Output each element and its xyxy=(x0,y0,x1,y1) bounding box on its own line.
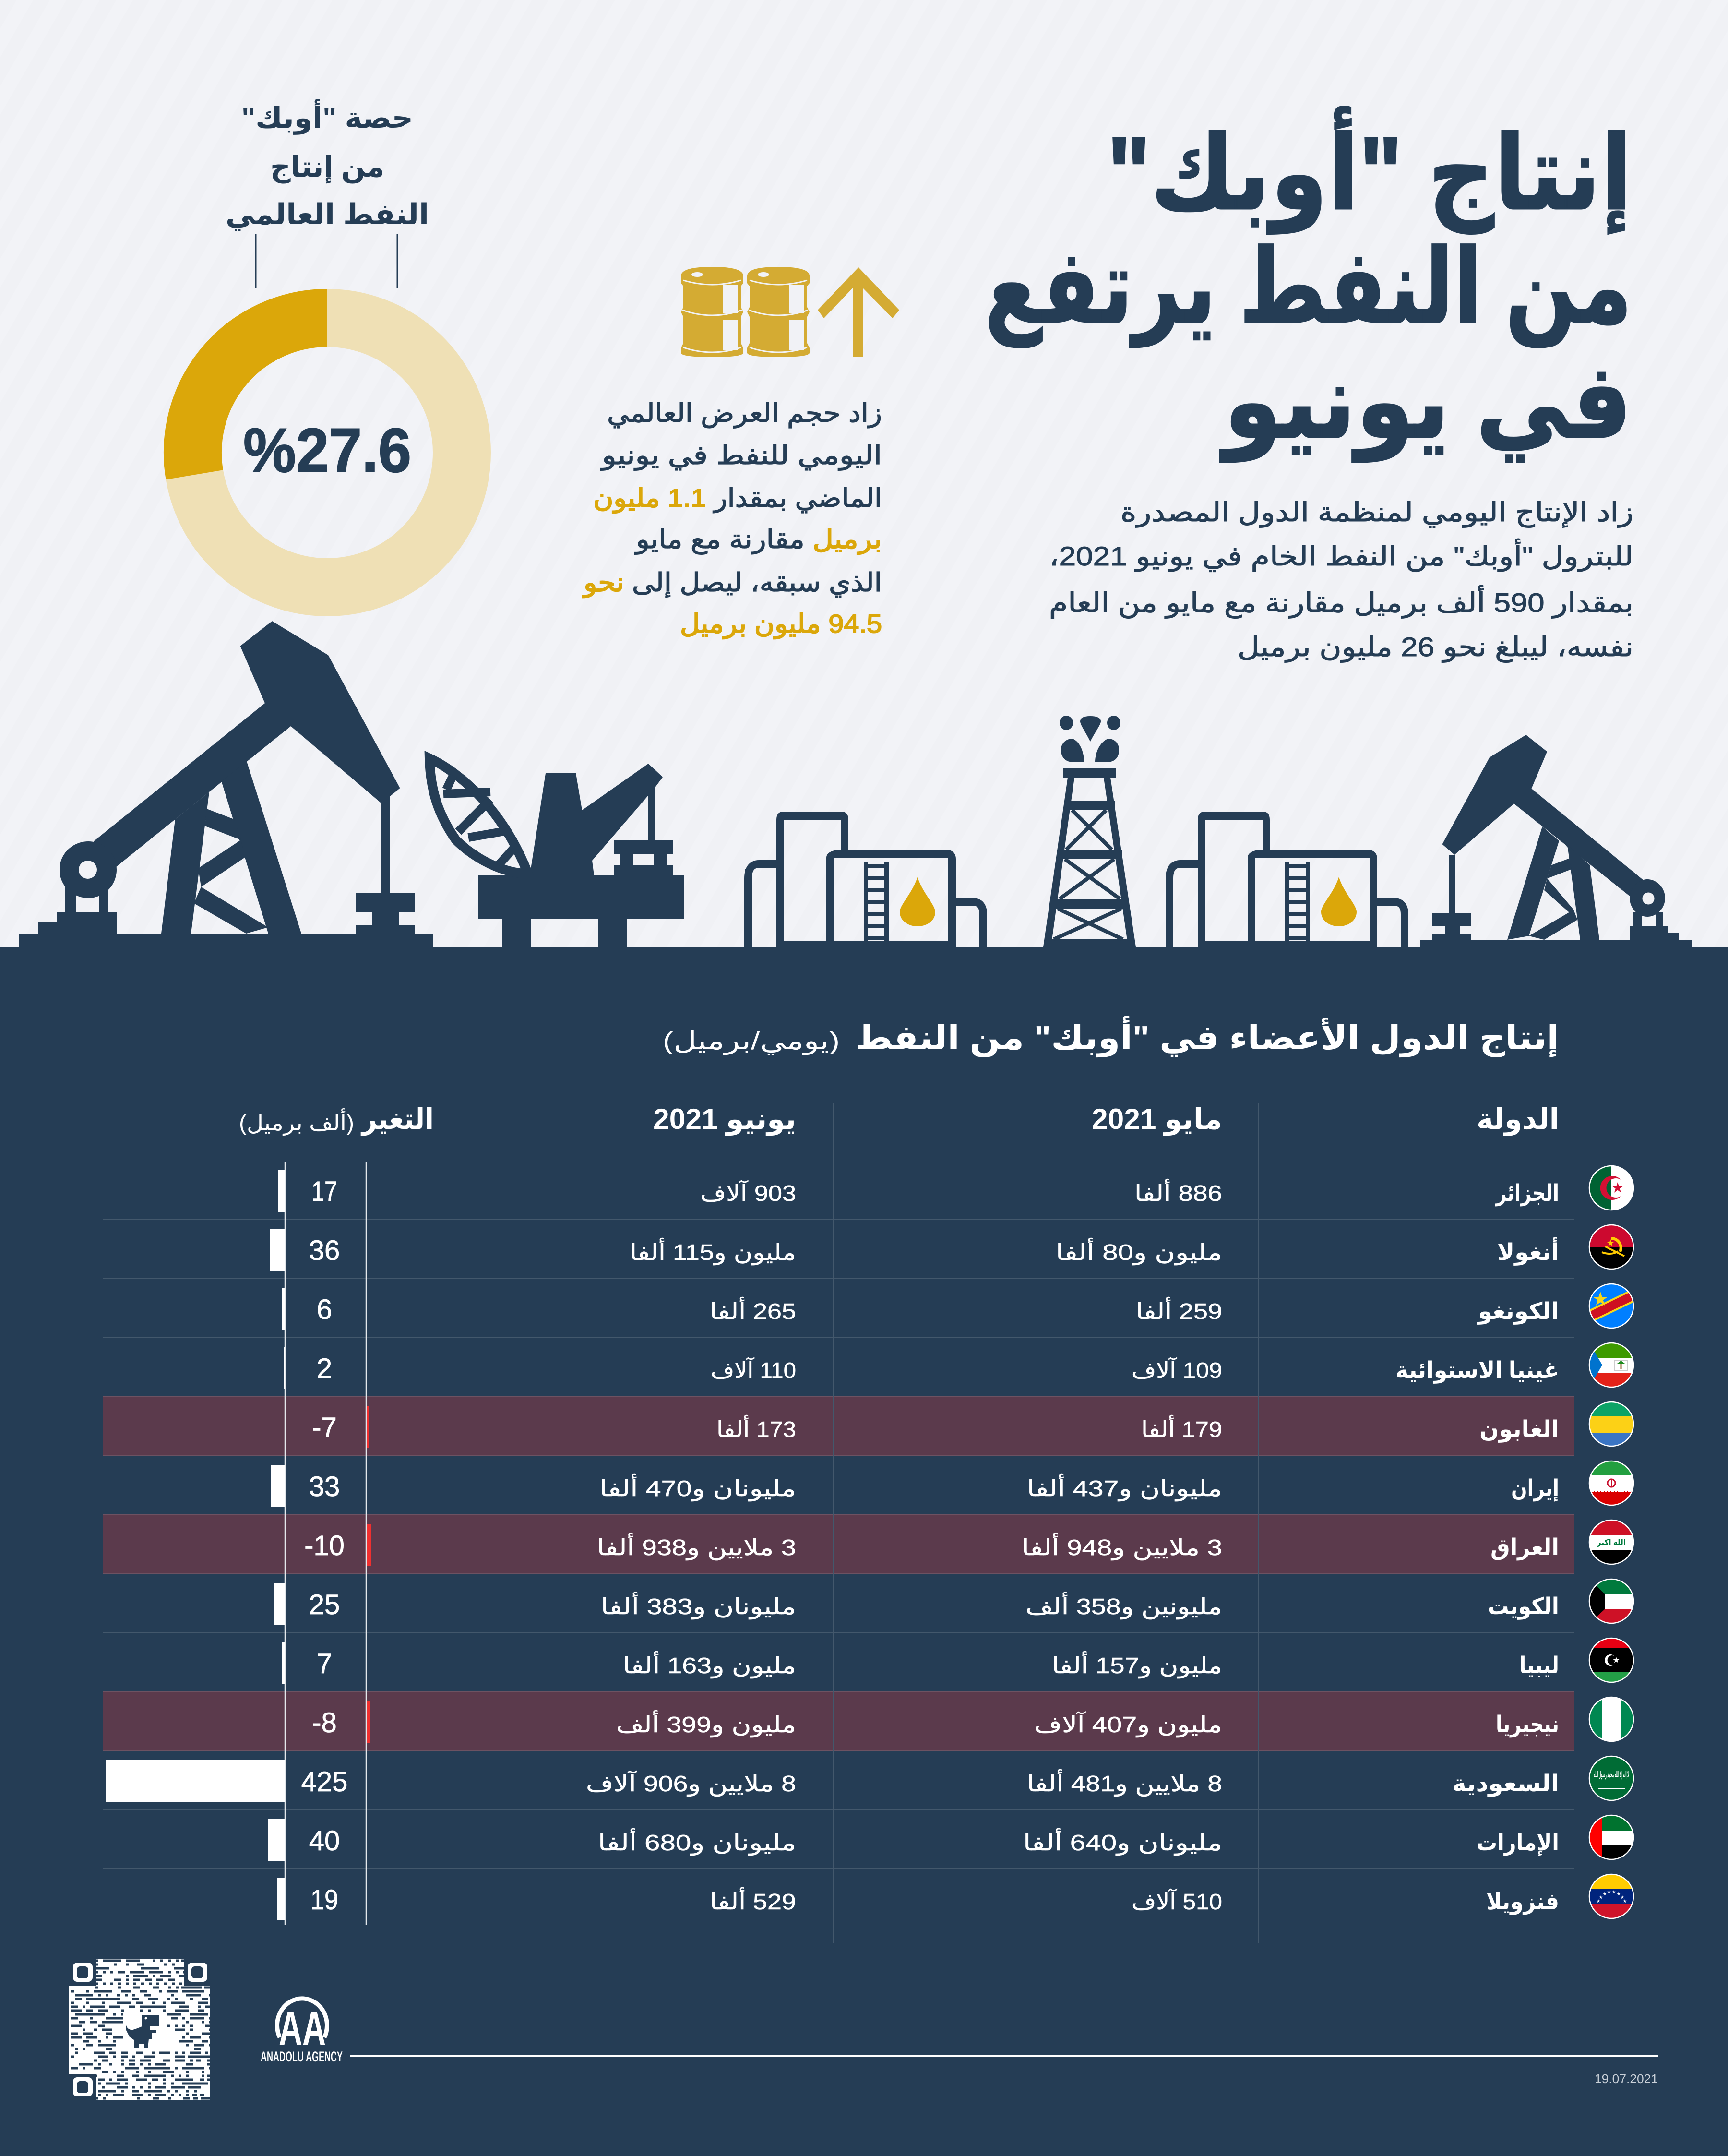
illustration: right pumpjack xyxy=(1420,735,1692,947)
row: Kuwait: 25 xyxy=(309,1589,340,1620)
row: UAE: مليونان و640 ألفا xyxy=(1023,1828,1222,1856)
row: Algeria: 17 xyxy=(311,1176,337,1207)
column headers: مايو 2021 xyxy=(1092,1103,1222,1136)
row: Iraq xyxy=(304,1520,1633,1566)
row: Saudi Arabia: 8 ملايين و906 آلاف xyxy=(586,1771,796,1797)
row: Algeria: 886 ألفا xyxy=(1134,1179,1222,1206)
row: Nigeria: مليون و407 آلاف xyxy=(1034,1712,1222,1738)
illustration: oil derrick xyxy=(1043,716,1136,947)
row: Iraq: 3 ملايين و948 ألفا xyxy=(1022,1533,1222,1561)
lead paragraph xyxy=(1049,497,1633,663)
lead paragraph: بمقدار 590 ألف برميل مقارنة مع مايو من العام xyxy=(1049,585,1633,619)
row: DR Congo: 259 ألفا xyxy=(1136,1297,1222,1324)
row: Saudi Arabia xyxy=(106,1756,1633,1802)
flag: Iran xyxy=(1589,1461,1633,1505)
row: Gabon: 173 ألفا xyxy=(716,1415,796,1442)
row: Equatorial Guinea: 110 آلاف xyxy=(711,1357,796,1383)
row: Equatorial Guinea xyxy=(284,1343,1633,1389)
illustration: offshore machine xyxy=(429,758,684,947)
donut heading xyxy=(226,99,429,231)
row: DR Congo xyxy=(282,1284,1635,1330)
flag: Kuwait xyxy=(1589,1579,1633,1623)
title: في يونيو xyxy=(1220,344,1632,463)
QR code xyxy=(69,1959,210,2100)
row: Saudi Arabia: 8 ملايين و481 ألفا xyxy=(1027,1769,1222,1797)
row: Angola: مليون و80 ألفا xyxy=(1056,1238,1222,1266)
donut heading: النفط العالمي xyxy=(226,198,429,231)
row: DR Congo: الكونغو xyxy=(1477,1299,1559,1325)
row: Gabon: -7 xyxy=(312,1412,337,1443)
row: Algeria: الجزائر xyxy=(1495,1181,1559,1207)
row: Venezuela: فنزويلا xyxy=(1486,1889,1559,1915)
row: Angola: أنغولا xyxy=(1497,1237,1559,1266)
Anadolu Agency logo: AA xyxy=(279,2001,326,2055)
row: Equatorial Guinea: 2 xyxy=(317,1353,332,1384)
row: Equatorial Guinea: غينيا الاستوائية xyxy=(1395,1358,1559,1384)
title xyxy=(985,106,1632,463)
row: Gabon: 179 ألفا xyxy=(1141,1415,1222,1442)
flag: Libya xyxy=(1589,1638,1633,1682)
table heading: إنتاج الدول الأعضاء في "أوبك" من النفط xyxy=(855,1016,1559,1058)
row: Venezuela: 510 آلاف xyxy=(1132,1889,1222,1914)
dark lower panel xyxy=(0,947,1728,2156)
row: Gabon xyxy=(312,1402,1633,1448)
row: Venezuela xyxy=(277,1874,1633,1920)
flag: Iraq: الله اكبر xyxy=(1597,1538,1626,1547)
supply text block: الماضي بمقدار 1.1 مليون xyxy=(593,484,882,513)
row: Algeria: 903 آلاف xyxy=(700,1180,796,1206)
flag: Equatorial Guinea xyxy=(1589,1343,1633,1387)
column headers xyxy=(239,1103,1559,1136)
row: Saudi Arabia: السعودية xyxy=(1452,1771,1559,1797)
row: Kuwait: مليونين و358 ألف xyxy=(1025,1592,1222,1620)
flag: Algeria xyxy=(1589,1166,1633,1210)
flag: UAE xyxy=(1589,1815,1633,1859)
row: UAE: 40 xyxy=(309,1825,340,1857)
Anadolu Agency logo: ANADOLU AGENCY xyxy=(261,2049,343,2065)
row: Iran: إيران xyxy=(1511,1476,1559,1502)
donut heading: من إنتاج xyxy=(270,151,384,184)
row: Libya: مليون و157 ألفا xyxy=(1052,1651,1222,1679)
row: UAE: الإمارات xyxy=(1477,1830,1559,1856)
text: لا إله إلا الله محمد رسول الله xyxy=(1594,1770,1629,1780)
footer rule xyxy=(350,2055,1658,2057)
supply text block xyxy=(582,399,882,639)
row: Angola: مليون و115 ألفا xyxy=(630,1238,796,1266)
row: Algeria xyxy=(278,1166,1633,1212)
flag: Nigeria xyxy=(1589,1697,1633,1741)
row: Iran: 33 xyxy=(309,1471,340,1502)
row: Kuwait: الكويت xyxy=(1488,1594,1559,1620)
supply text block: 94.5 مليون برميل xyxy=(680,610,882,639)
illustration: storage tanks xyxy=(745,812,1407,948)
row: Libya: ليبيا xyxy=(1519,1653,1559,1678)
date: 19.07.2021 xyxy=(1595,2072,1658,2086)
row: Libya: مليون و163 ألفا xyxy=(623,1651,796,1679)
row: UAE xyxy=(268,1815,1633,1861)
lead paragraph: زاد الإنتاج اليومي لمنظمة الدول المصدرة xyxy=(1120,497,1633,528)
table heading: (يومي/برميل) xyxy=(663,1027,840,1055)
row: Nigeria: نيجيريا xyxy=(1496,1712,1559,1738)
row: Saudi Arabia: 425 xyxy=(301,1766,347,1797)
row: Angola xyxy=(270,1225,1633,1271)
row: Nigeria xyxy=(312,1697,1633,1743)
icon: oil barrels and up arrow xyxy=(681,267,899,357)
row: Angola: 36 xyxy=(309,1235,340,1266)
Anadolu Agency logo xyxy=(261,1999,343,2065)
flag: DR Congo xyxy=(1587,1284,1635,1328)
row: Iraq: العراق xyxy=(1490,1535,1559,1561)
flag: Gabon xyxy=(1589,1402,1633,1446)
row: Kuwait xyxy=(274,1579,1633,1625)
donut chart: OPEC share: %27.6 xyxy=(243,415,411,485)
row: Gabon: الغابون xyxy=(1479,1417,1559,1443)
flag: Iraq xyxy=(1589,1520,1633,1564)
row: Iran xyxy=(271,1461,1633,1507)
column headers: (ألف برميل) xyxy=(239,1108,354,1136)
lead paragraph: نفسه، ليبلغ نحو 26 مليون برميل xyxy=(1238,632,1633,663)
row: Venezuela: 19 xyxy=(310,1884,338,1916)
column headers: يونيو 2021 xyxy=(653,1103,796,1136)
row: Iraq: -10 xyxy=(304,1530,345,1561)
row: Kuwait: مليونان و383 ألفا xyxy=(601,1592,796,1620)
row: Libya: 7 xyxy=(317,1648,332,1679)
illustration: left pumpjack xyxy=(19,621,433,947)
supply text block: اليومي للنفط في يونيو xyxy=(600,441,882,470)
flag: Saudi Arabia xyxy=(1589,1756,1633,1800)
row: DR Congo: 6 xyxy=(317,1294,332,1325)
row: Nigeria: -8 xyxy=(312,1707,337,1738)
row: Iran: مليونان و437 ألفا xyxy=(1027,1474,1222,1502)
row: DR Congo: 265 ألفا xyxy=(710,1297,796,1324)
column headers: التغير xyxy=(360,1103,434,1136)
row: Iraq: 3 ملايين و938 ألفا xyxy=(597,1533,796,1561)
supply text block: زاد حجم العرض العالمي xyxy=(607,399,882,428)
row: Iran: مليونان و470 ألفا xyxy=(599,1474,796,1502)
page background xyxy=(0,0,1728,950)
title: إنتاج "أوبك" xyxy=(1107,106,1632,234)
donut chart: OPEC share xyxy=(192,234,462,587)
table row highlights for declining producers xyxy=(103,1396,1574,1750)
supply text block: الذي سبقه، ليصل إلى نحو xyxy=(582,568,882,598)
donut heading: حصة "أوبك" xyxy=(241,99,413,135)
row: Venezuela: 529 ألفا xyxy=(710,1887,796,1914)
flag: Venezuela xyxy=(1589,1874,1633,1918)
flag: Angola xyxy=(1589,1225,1633,1269)
row: Libya xyxy=(282,1638,1633,1684)
lead paragraph: للبترول "أوبك" من النفط الخام في يونيو 2021، xyxy=(1049,539,1633,572)
supply text block: برميل مقارنة مع مايو xyxy=(634,525,882,555)
row: UAE: مليونان و680 ألفا xyxy=(598,1828,796,1856)
row: Nigeria: مليون و399 ألف xyxy=(616,1710,796,1738)
row: Equatorial Guinea: 109 آلاف xyxy=(1132,1357,1222,1383)
table heading xyxy=(663,1016,1559,1058)
column headers: الدولة xyxy=(1477,1103,1559,1136)
